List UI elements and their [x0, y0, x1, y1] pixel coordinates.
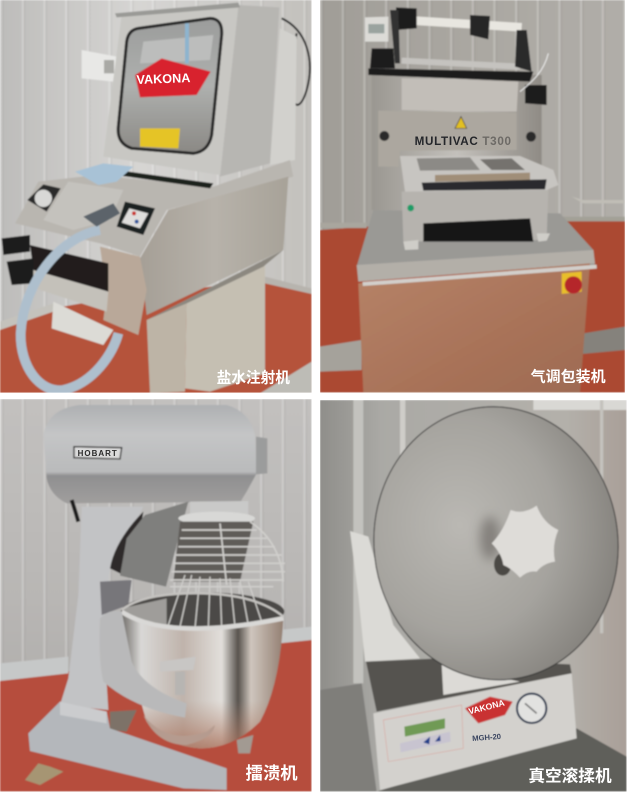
VAKONA logo text: VAKONA: [467, 697, 506, 716]
label: 真空滚揉机: 真空滚揉机: [528, 766, 612, 786]
machine: brine injector scene: [0, 0, 312, 393]
MULTIVAC T300 text: MULTIVAC T300: [415, 135, 512, 148]
panel: mixer photo: [0, 399, 312, 792]
label: 盐水注射机: 盐水注射机: [217, 369, 290, 387]
panel: modified atmosphere packaging machine photo: [320, 0, 625, 393]
machine: packaging machine scene: [320, 0, 625, 393]
model MGH-20 text: MGH-20: [472, 732, 501, 743]
label: 擂溃机: 擂溃机: [246, 763, 298, 783]
machine: vacuum tumbler scene: [320, 395, 632, 792]
VAKONA logo text: VAKONA: [136, 71, 191, 87]
machine: Hobart mixer scene: [0, 399, 312, 792]
label: 气调包装机: 气调包装机: [531, 367, 606, 385]
panel: brine injector photo: [0, 0, 312, 393]
HOBART nameplate text: HOBART: [78, 449, 118, 458]
panel: vacuum tumbler photo: [320, 395, 632, 792]
